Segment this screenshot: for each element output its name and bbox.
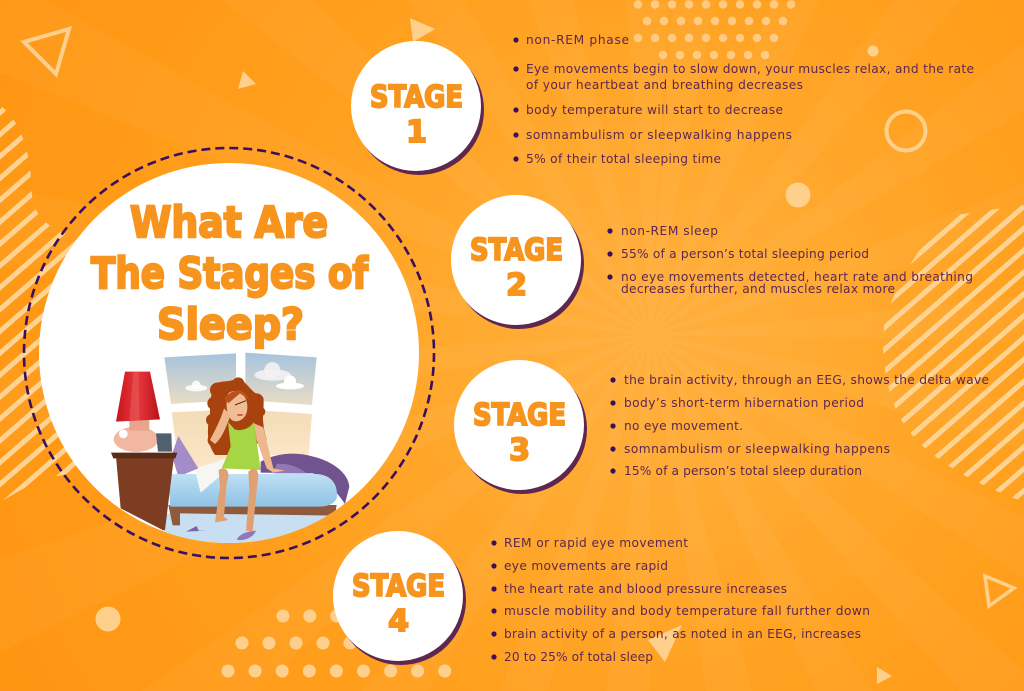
title: What Are — [130, 198, 328, 248]
stage 4 list: REM or rapid eye movement — [504, 536, 688, 550]
stage 3 badge — [454, 360, 587, 494]
stage 1 badge: STAGE — [370, 80, 463, 115]
title: The Stages of — [91, 249, 369, 299]
stage 1 list — [513, 33, 974, 166]
nightstand with lamp and mug — [111, 372, 177, 530]
window — [164, 353, 317, 468]
stage 4 list: brain activity of a person, as noted in an EEG, increases — [504, 627, 861, 641]
decorative stripe blob left — [0, 107, 78, 501]
stage 4 list: muscle mobility and body temperature fall further down — [504, 604, 870, 618]
stage 4 badge: STAGE — [352, 569, 445, 604]
bed — [168, 436, 349, 525]
stage 2 list — [607, 224, 973, 296]
stage 2 list: non-REM sleep — [621, 224, 718, 238]
illustration: girl waking up in bedroom — [111, 353, 349, 553]
stage 4 badge: 4 — [388, 604, 409, 639]
stage 4 list: 20 to 25% of total sleep — [504, 650, 653, 664]
girl — [186, 377, 285, 540]
stage 3 list: somnambulism or sleepwalking happens — [624, 442, 890, 456]
stage 1 badge — [351, 41, 484, 175]
stage 1 badge: 1 — [406, 115, 427, 150]
stage 1 list: body temperature will start to decrease — [526, 103, 783, 117]
decorative dots bottom — [228, 616, 450, 671]
stage 4 list — [491, 536, 870, 664]
stage 2 list: 55% of a person’s total sleeping period — [621, 247, 869, 261]
stage 4 list: the heart rate and blood pressure increases — [504, 582, 787, 596]
stage 3 badge: 3 — [509, 433, 530, 468]
stage 1 list: non-REM phase — [526, 33, 629, 47]
stage 4 badge — [333, 531, 466, 665]
stage 3 list: body’s short-term hibernation period — [624, 396, 864, 410]
dashed ring — [24, 148, 434, 558]
stage 3 list — [610, 373, 989, 478]
title: Sleep? — [157, 300, 304, 350]
stage 3 list: no eye movement. — [624, 419, 743, 433]
stage 1 list: somnambulism or sleepwalking happens — [526, 128, 792, 142]
stage 2 badge: STAGE — [470, 233, 563, 268]
stage 1 list: of your heartbeat and breathing decreases — [526, 78, 803, 92]
floor — [162, 513, 330, 543]
stage 2 badge: 2 — [506, 268, 527, 303]
title — [91, 198, 369, 350]
stage 1 list: Eye movements begin to slow down, your muscles relax, and the rate — [526, 62, 974, 76]
stage 1 list: 5% of their total sleeping time — [526, 152, 721, 166]
stage 3 badge: STAGE — [473, 398, 566, 433]
stage 2 list: no eye movements detected, heart rate and breathing — [621, 270, 973, 284]
stage 4 list: eye movements are rapid — [504, 559, 668, 573]
stage 2 badge — [451, 195, 584, 329]
decorative dots top — [638, 4, 795, 55]
stage 2 list: decreases further, and muscles relax more — [621, 282, 895, 296]
stage 3 list: the brain activity, through an EEG, shows the delta wave — [624, 373, 989, 387]
main circle — [39, 163, 419, 543]
decorative stripe blob right — [883, 205, 1024, 500]
stage 3 list: 15% of a person’s total sleep duration — [624, 464, 862, 478]
